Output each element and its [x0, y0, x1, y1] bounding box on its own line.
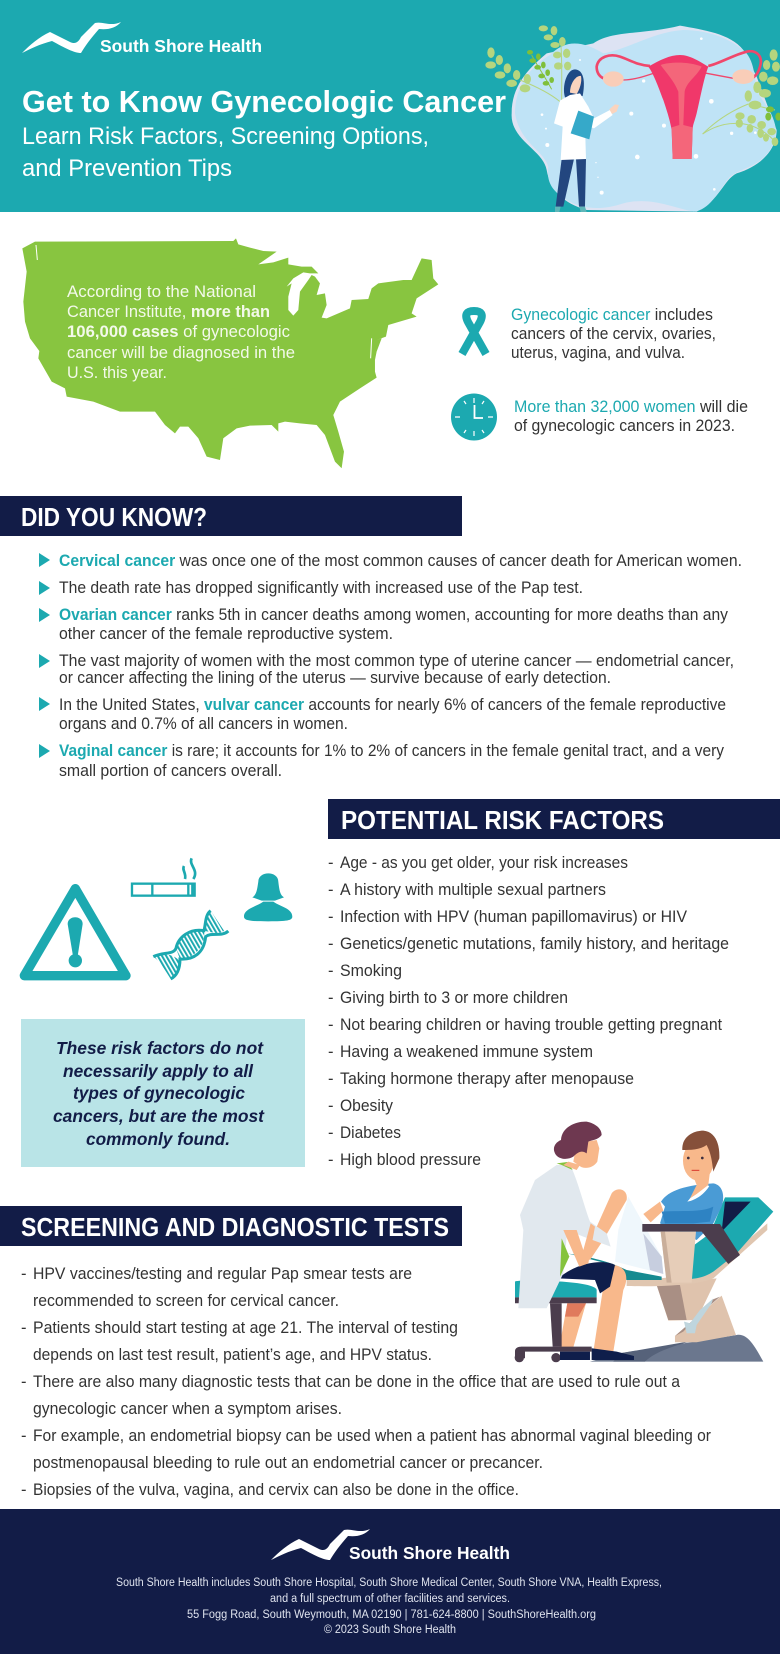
- list: potential risk factors: -: [328, 989, 334, 1007]
- list: potential risk factors: Obesity: [340, 1097, 394, 1115]
- list: screening and diagnostic tests: There are also many diagnostic tests that can be done in the office that are used to rule out a: [33, 1373, 681, 1391]
- heading: did you know: [0, 496, 462, 536]
- list: screening and diagnostic tests: -: [21, 1319, 26, 1337]
- list: screening and diagnostic tests: [21, 1265, 711, 1499]
- list: potential risk factors: Infection with HPV (human papillomavirus) or HIV: [340, 908, 687, 926]
- list: potential risk factors: -: [328, 962, 334, 980]
- text: footer details: © 2023 South Shore Health: [324, 1624, 456, 1636]
- list: did you know facts: The vast majority of women with the most common type of uterine cancer — endometrial cancer,: [59, 652, 734, 670]
- list: potential risk factors: -: [328, 1043, 334, 1061]
- panel: footer: [0, 1509, 780, 1654]
- list: potential risk factors: -: [328, 881, 334, 899]
- list: potential risk factors: [328, 854, 729, 1169]
- subtitle: Learn Risk Factors, Screening Options,: [22, 123, 429, 150]
- list: screening and diagnostic tests: -: [21, 1481, 26, 1499]
- icons: risk factors: [24, 858, 292, 979]
- list: potential risk factors: -: [328, 1124, 334, 1142]
- list: screening and diagnostic tests: depends on last test result, patient’s age, and HPV status.: [33, 1346, 432, 1364]
- illustration: patient exam: [515, 1122, 773, 1362]
- subtitle: and Prevention Tips: [22, 155, 232, 182]
- list: screening and diagnostic tests: recommended to screen for cervical cancer.: [33, 1292, 339, 1310]
- list: screening and diagnostic tests: Patients should start testing at age 21. The interval of testing: [33, 1319, 458, 1337]
- illustration: doctor and uterus: [485, 25, 780, 212]
- list: potential risk factors: Taking hormone therapy after menopause: [340, 1070, 634, 1088]
- list: did you know facts: other cancer of the female reproductive system.: [59, 625, 393, 643]
- list: screening and diagnostic tests: -: [21, 1427, 26, 1445]
- map: United States: [22, 238, 438, 468]
- logo: South Shore Health: [22, 22, 262, 56]
- list: potential risk factors: -: [328, 908, 334, 926]
- list: potential risk factors: Having a weakened immune system: [340, 1043, 593, 1061]
- text: national statistic: [67, 283, 295, 382]
- heading: did you know: DID YOU KNOW?: [21, 504, 207, 532]
- list: screening and diagnostic tests: gynecologic cancer when a symptom arises.: [33, 1400, 342, 1418]
- callout: risk factor note: [21, 1019, 305, 1167]
- list: potential risk factors: High blood pressure: [340, 1151, 481, 1169]
- text: national statistic: Cancer Institute, more than: [67, 303, 270, 321]
- heading: potential risk factors: POTENTIAL RISK FACTORS: [341, 807, 664, 835]
- heading: screening and diagnostic tests: SCREENING AND DIAGNOSTIC TESTS: [21, 1214, 449, 1242]
- list: screening and diagnostic tests: For example, an endometrial biopsy can be used when a patient has abnormal vaginal bleeding or: [33, 1427, 711, 1445]
- text: national statistic: 106,000 cases of gynecologic: [67, 323, 290, 341]
- panel: header banner: [0, 0, 780, 212]
- list: did you know facts: [39, 552, 742, 780]
- list: potential risk factors: Genetics/genetic mutations, family history, and heritage: [340, 935, 729, 953]
- list: screening and diagnostic tests: Biopsies of the vulva, vagina, and cervix can also be done in the office.: [33, 1481, 519, 1499]
- list: did you know facts: The death rate has dropped significantly with increased use of the Pap test.: [59, 579, 583, 597]
- text: national statistic: cancer will be diagnosed in the: [67, 344, 295, 362]
- text: national statistic: U.S. this year.: [67, 364, 167, 382]
- text: footer details: and a full spectrum of other facilities and services.: [270, 1593, 510, 1605]
- text: gynecologic cancer definition: Gynecologic cancer includes: [511, 306, 713, 324]
- callout: risk factor note: cancers, but are the most: [53, 1106, 265, 1126]
- text: footer details: [116, 1577, 662, 1636]
- logo: South Shore Health: South Shore Health: [100, 36, 262, 56]
- list: did you know facts: or cancer affecting the lining of the uterus — survive because of early detection.: [59, 669, 611, 687]
- list: screening and diagnostic tests: -: [21, 1265, 26, 1283]
- icon: warning triangle: [24, 889, 126, 976]
- icon: woman silhouette: [244, 873, 292, 921]
- list: screening and diagnostic tests: HPV vaccines/testing and regular Pap smear tests are: [33, 1265, 412, 1283]
- list: did you know facts: In the United States, vulvar cancer accounts for nearly 6% of cancers of the female reproductive: [59, 696, 726, 714]
- list: potential risk factors: -: [328, 935, 334, 953]
- list: potential risk factors: Smoking: [340, 962, 402, 980]
- callout: risk factor note: These risk factors do not: [56, 1038, 264, 1058]
- list: did you know facts: Ovarian cancer ranks 5th in cancer deaths among women, accounting for more deaths than any: [59, 606, 729, 624]
- list: potential risk factors: A history with multiple sexual partners: [340, 881, 606, 899]
- list: potential risk factors: Not bearing children or having trouble getting pregnant: [340, 1016, 722, 1034]
- subtitle: [22, 123, 429, 182]
- logo: footer South Shore Health: South Shore Health: [349, 1543, 510, 1563]
- text: footer details: South Shore Health includes South Shore Hospital, South Shore Medical Center, South Shore VNA, Health Express,: [116, 1577, 662, 1589]
- list: potential risk factors: -: [328, 1151, 334, 1169]
- text: mortality statistic: More than 32,000 women will die: [514, 398, 748, 416]
- text: national statistic: According to the National: [67, 283, 256, 301]
- list: potential risk factors: Giving birth to 3 or more children: [340, 989, 568, 1007]
- callout: risk factor note: necessarily apply to all: [63, 1061, 254, 1081]
- icon: cigarette: [132, 858, 195, 896]
- text: footer details: 55 Fogg Road, South Weymouth, MA 02190 | 781-624-8800 | SouthShoreHealth.org: [187, 1609, 596, 1621]
- list: did you know facts: organs and 0.7% of all cancers in women.: [59, 715, 348, 733]
- panel: US map with statistic: [22, 238, 438, 468]
- title: Get to Know Gynecologic Cancer: [22, 84, 506, 119]
- text: gynecologic cancer definition: uterus, vagina, and vulva.: [511, 344, 685, 362]
- callout: risk factor note: types of gynecologic: [73, 1083, 245, 1103]
- list: did you know facts: Vaginal cancer is rare; it accounts for 1% to 2% of cancers in the female genital tract, and a very: [59, 742, 725, 760]
- list: potential risk factors: -: [328, 1016, 334, 1034]
- list: potential risk factors: -: [328, 1097, 334, 1115]
- icon: awareness ribbon: [462, 311, 486, 354]
- icon: DNA helix: [153, 911, 228, 979]
- list: screening and diagnostic tests: postmenopausal bleeding to rule out an endometrial cancer or precancer.: [33, 1454, 543, 1472]
- icon: clock: [451, 394, 497, 440]
- heading: screening and diagnostic tests: [0, 1206, 462, 1246]
- list: potential risk factors: Age - as you get older, your risk increases: [340, 854, 628, 872]
- list: did you know facts: small portion of cancers overall.: [59, 762, 282, 780]
- list: potential risk factors: -: [328, 854, 334, 872]
- heading: potential risk factors: [328, 799, 780, 839]
- list: potential risk factors: Diabetes: [340, 1124, 401, 1142]
- logo: footer South Shore Health: [271, 1529, 510, 1563]
- text: gynecologic cancer definition: cancers of the cervix, ovaries,: [511, 325, 716, 343]
- callout: risk factor note: commonly found.: [86, 1129, 230, 1149]
- text: mortality statistic: [514, 398, 748, 435]
- text: mortality statistic: of gynecologic cancers in 2023.: [514, 417, 735, 435]
- list: potential risk factors: -: [328, 1070, 334, 1088]
- list: did you know facts: Cervical cancer was once one of the most common causes of cancer death for American women.: [59, 552, 742, 570]
- text: gynecologic cancer definition: [511, 306, 716, 362]
- list: screening and diagnostic tests: -: [21, 1373, 26, 1391]
